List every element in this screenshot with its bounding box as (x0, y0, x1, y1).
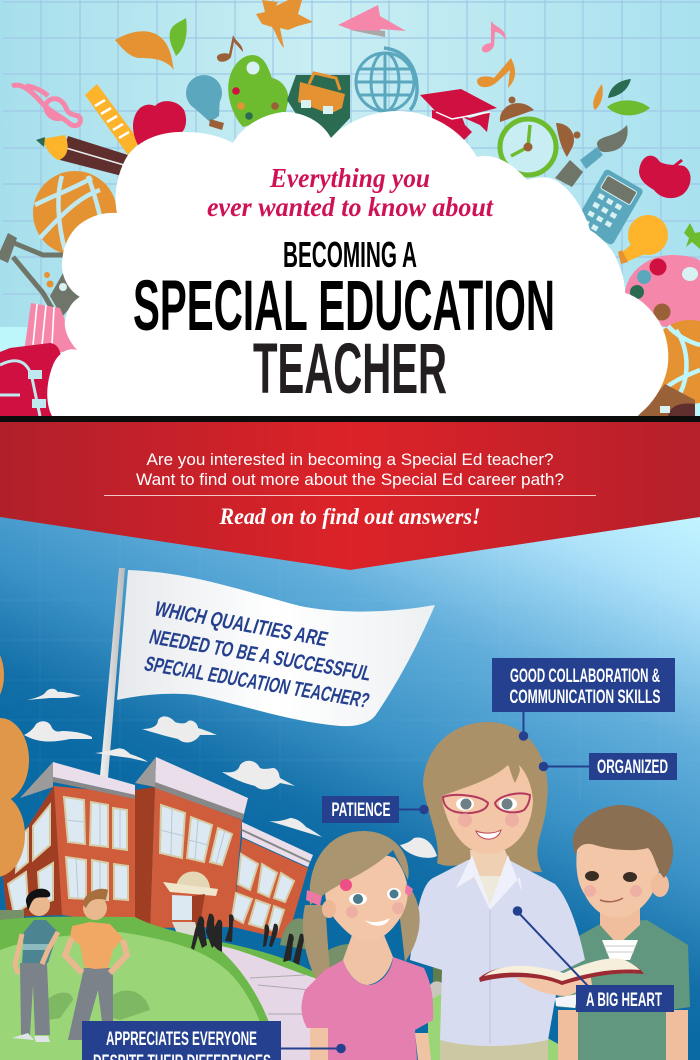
icon: green star (684, 223, 700, 249)
teacher cheeks (458, 813, 519, 827)
boy arm skin (558, 1010, 688, 1060)
girl face (325, 854, 408, 941)
icon: pink book (24, 303, 78, 352)
teacher neck and blouse (470, 850, 515, 905)
girl arm skin (310, 1028, 431, 1060)
right wing (233, 822, 313, 940)
school entrance (163, 872, 218, 940)
icon: paper plane (338, 5, 406, 37)
title text block (133, 163, 555, 409)
girl hair (310, 831, 409, 905)
tree behind teacher (430, 951, 452, 1000)
icon: paint brush (555, 125, 628, 187)
icon: pink music note (482, 21, 506, 52)
green lawn and path (0, 917, 340, 1060)
icon: red bag (0, 343, 62, 416)
teacher fringe (425, 724, 520, 797)
icon: red graduation cap (420, 89, 497, 140)
girl neck (343, 930, 393, 985)
icon: pencil (36, 135, 128, 176)
lawn behind teacher (428, 985, 560, 1060)
callout: a big heart (513, 906, 674, 1012)
teacher cuff (555, 994, 578, 1008)
window muntins (65, 803, 225, 900)
icon: three leaves (593, 79, 650, 115)
middle and right wing windows (160, 805, 294, 932)
boy undershirt (602, 940, 638, 960)
girl (301, 831, 433, 1060)
flag pole (100, 568, 125, 778)
sky clouds (24, 689, 437, 858)
girl hair bands (306, 884, 413, 906)
left wing (2, 762, 135, 925)
lawn shadows (47, 990, 150, 1020)
icon: blue light bulb (186, 75, 224, 130)
icon: yellow light bulb (618, 215, 668, 264)
callout: good collaboration and communication skills (492, 658, 675, 741)
icon: orange leaf (115, 31, 174, 70)
girl ear (322, 900, 336, 918)
teacher hand (516, 972, 592, 996)
teacher eyes (456, 798, 517, 810)
icon: orange and green bag (287, 73, 350, 138)
sky background (0, 510, 700, 1060)
boy with orange shirt (65, 889, 127, 1040)
icon: green leaf (170, 18, 187, 56)
icon: grey drawing compass (0, 233, 80, 317)
girl shirt (301, 957, 433, 1060)
heading: becoming a: BECOMING A (283, 234, 417, 275)
orange tree (0, 645, 29, 877)
boy shirt (557, 920, 690, 1060)
boy cheeks (584, 885, 642, 897)
title cloud (47, 111, 668, 416)
callout: patience: PATIENCE (332, 800, 390, 821)
teacher pants (440, 1040, 548, 1060)
script intro line 1: Everything you (269, 163, 430, 193)
school building (2, 757, 313, 940)
icon: blue globe (356, 48, 417, 111)
left wing windows (8, 797, 128, 914)
banner question line 1: Are you interested in becoming a Special Ed teacher? (146, 450, 554, 469)
teacher (410, 722, 644, 1060)
girl eyes (349, 888, 401, 905)
girl cheeks (346, 902, 404, 918)
teacher back hair (423, 722, 548, 872)
icon: yellow ruler (85, 84, 140, 155)
callout: appreciates everyone despite their differences: APPRECIATES EVERYONE (106, 1029, 257, 1050)
boy face (576, 827, 659, 918)
header background with grid (0, 0, 700, 416)
icon: red apple right (639, 156, 691, 198)
red banner (0, 422, 700, 570)
icon: maple leaf (256, 0, 313, 48)
flag question line 3: SPECIAL EDUCATION TEACHER? (141, 653, 372, 713)
distant bushes (0, 910, 360, 970)
girl pigtails (303, 885, 420, 1012)
boy smile (600, 898, 623, 902)
icon: green palette (228, 55, 288, 127)
icon: green alarm clock (500, 96, 580, 175)
open book (479, 960, 644, 985)
boy neck (600, 905, 640, 945)
teacher face (442, 752, 533, 854)
boy with dark hair (12, 889, 58, 1042)
callout: patience (322, 796, 429, 823)
girl flower (340, 879, 352, 891)
icon: pink palette (625, 255, 700, 327)
boy hair (573, 805, 673, 878)
banner script call to action: Read on to find out answers! (219, 504, 481, 529)
flag question line 1: WHICH QUALITIES ARE (151, 598, 331, 651)
icon: red apple (133, 101, 186, 145)
icon: calculator (582, 170, 643, 244)
icon: brown music note (217, 35, 243, 62)
callout: appreciates everyone despite their differences (82, 1021, 346, 1060)
icon: brown bag (638, 384, 695, 416)
icon: orange music note (477, 58, 515, 88)
school icons around the cloud (0, 0, 700, 416)
flag with question (117, 570, 435, 726)
teacher smile (476, 830, 501, 839)
student silhouettes (191, 914, 304, 965)
flag question line 2: NEEDED TO BE A SUCCESSFUL (146, 626, 374, 686)
boy eyes (585, 871, 637, 882)
callout: organized (539, 753, 677, 780)
script intro line 2: ever wanted to know about (207, 192, 494, 222)
banner question line 2: Want to find out more about the Special Ed career path? (136, 470, 564, 489)
icon: orange basketball (33, 171, 117, 255)
black divider bar (0, 416, 700, 422)
teacher shirt (410, 858, 585, 1046)
girl smile (365, 918, 390, 926)
teacher glasses (443, 793, 530, 813)
icon: orange basketball right (659, 320, 700, 404)
middle wing (135, 757, 248, 928)
boy (557, 805, 690, 1060)
heading: teacher: TEACHER (253, 330, 447, 409)
boy ear (651, 873, 669, 897)
icon: treble clef (12, 85, 80, 126)
